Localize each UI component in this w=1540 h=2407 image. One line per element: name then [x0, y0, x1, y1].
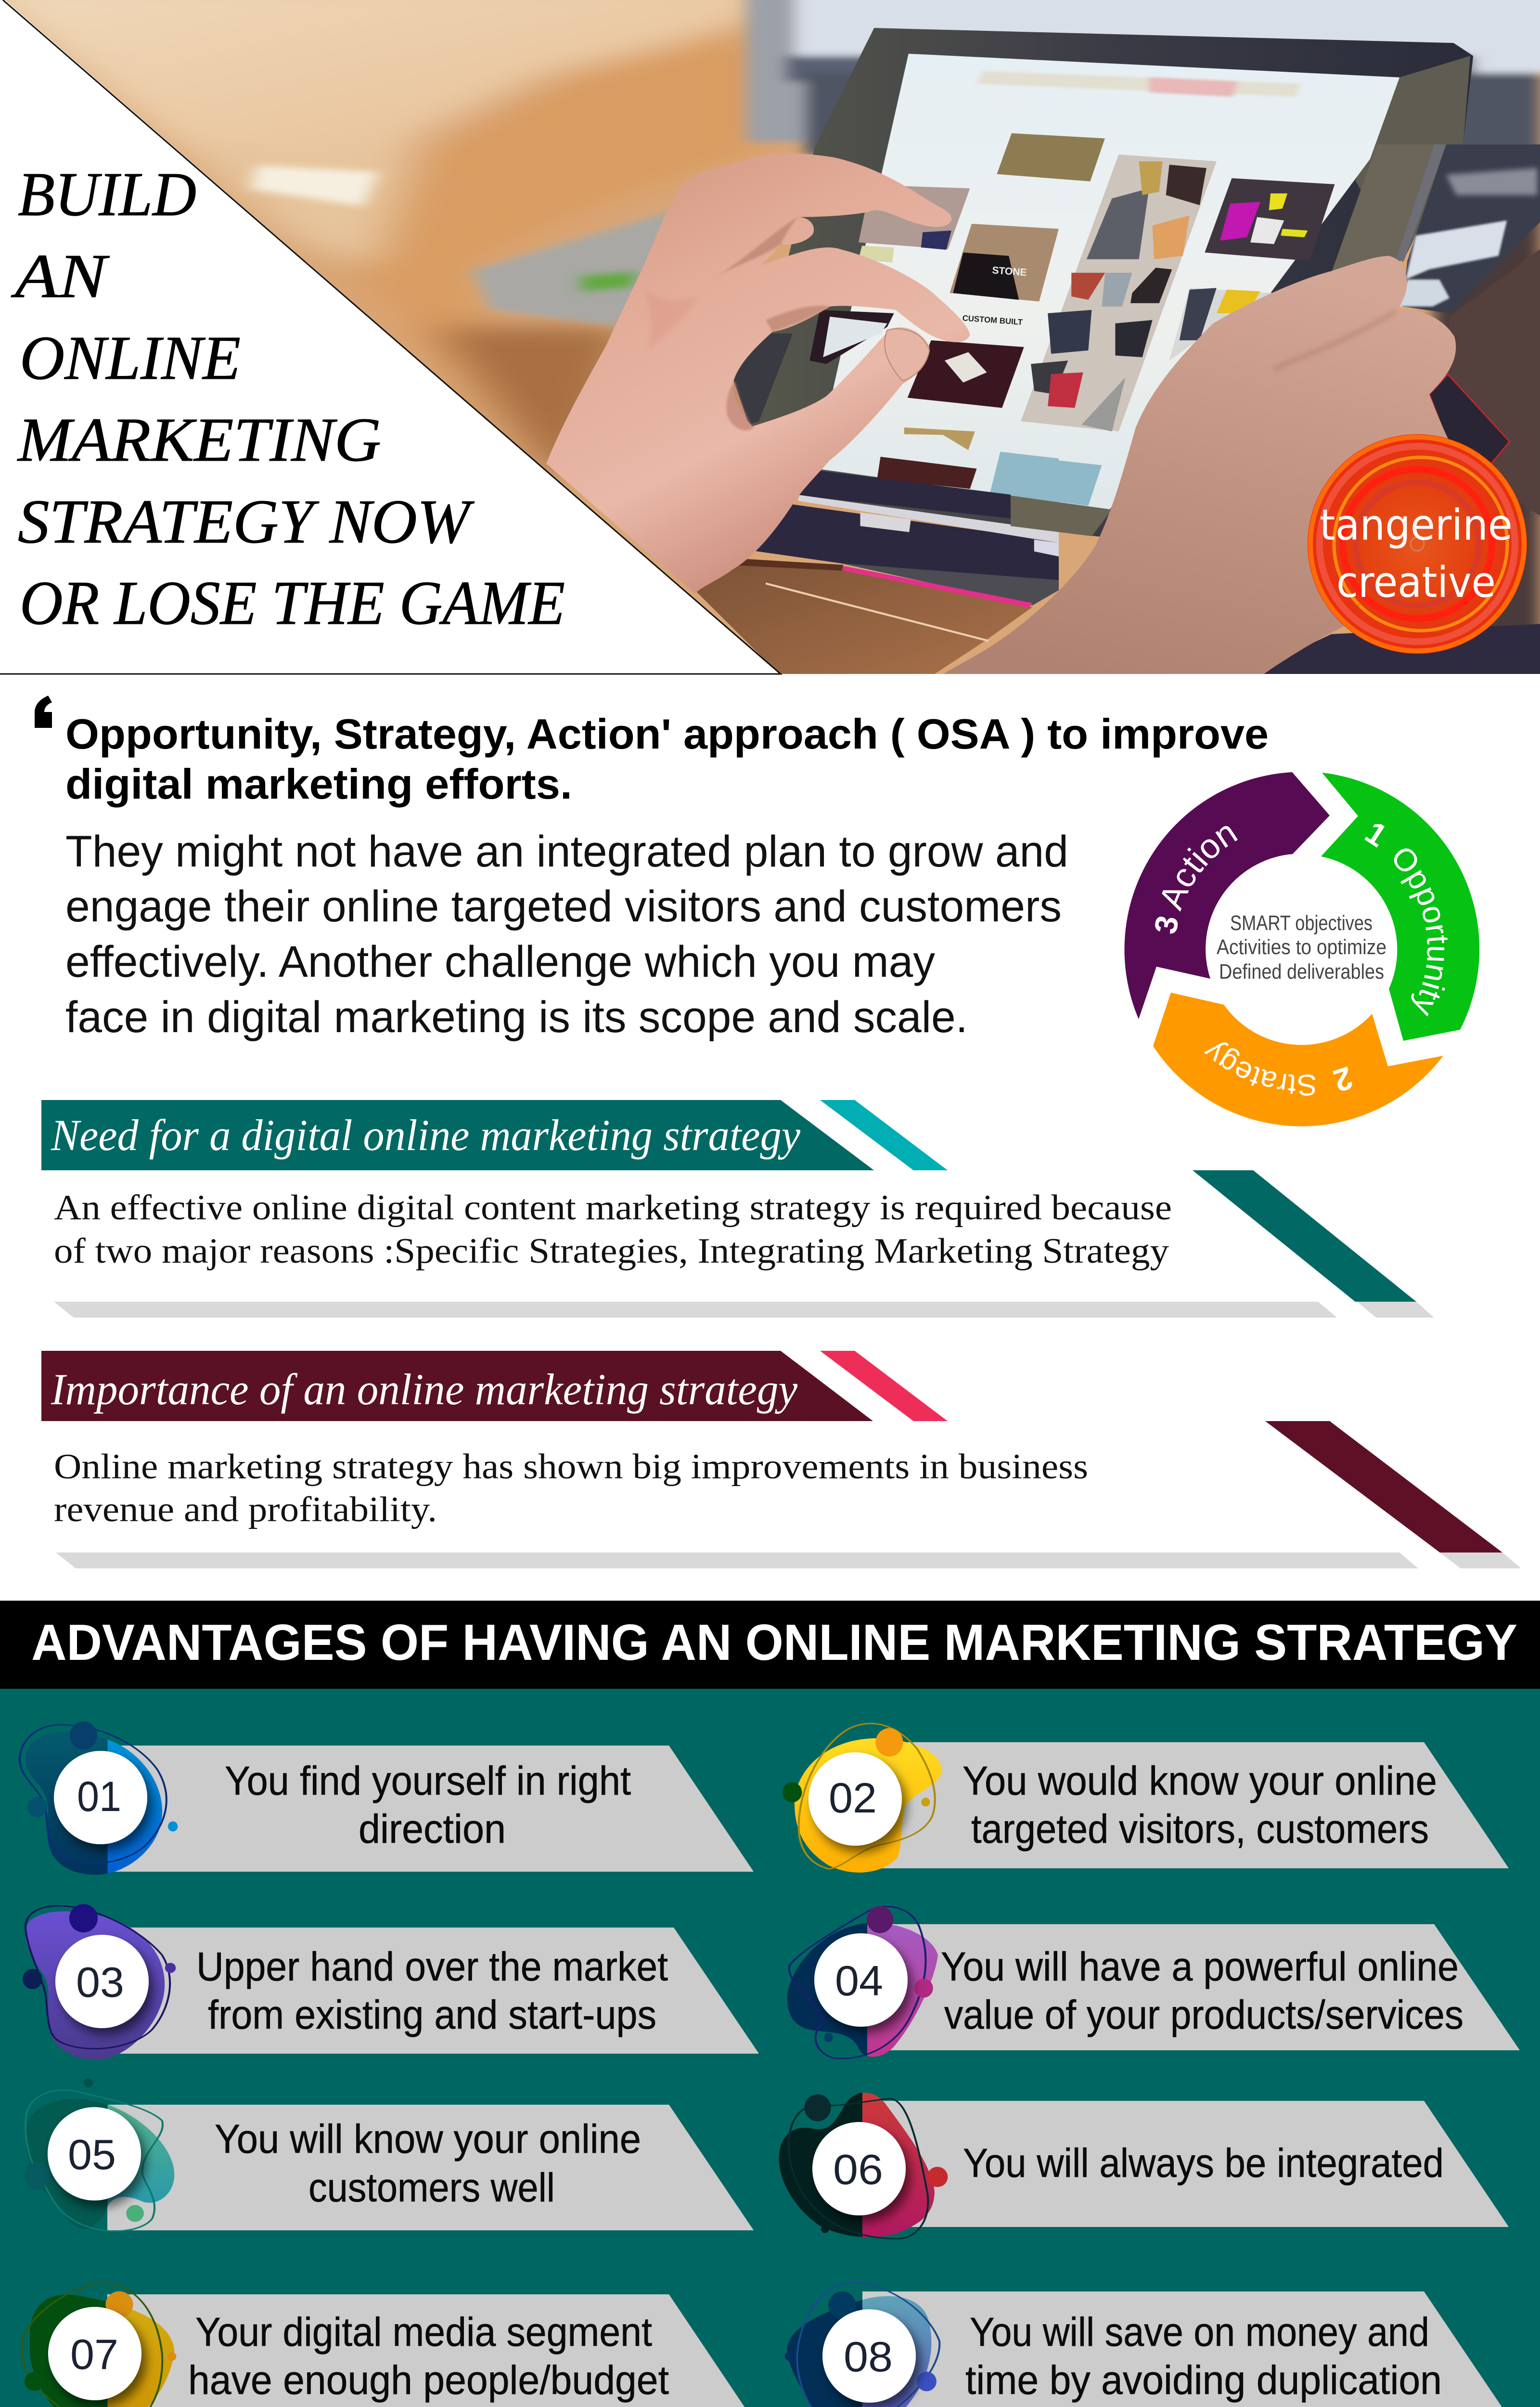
- item 05: 05: [68, 2131, 116, 2178]
- ring labels: 1: [1364, 824, 1385, 847]
- banner heading: Importance of an online marketing strategy: [51, 1365, 797, 1414]
- ring labels: Action: [1152, 813, 1244, 915]
- item 01: You find yourself in right: [225, 1758, 631, 1803]
- hero title: [11, 160, 565, 638]
- body text: Online marketing strategy has shown big improvements in business: [54, 1447, 1088, 1487]
- segment: action: [1125, 772, 1330, 1019]
- item 02: 02: [829, 1774, 877, 1822]
- logo: tangerine creative: tangerine: [1320, 500, 1513, 550]
- OSA body text: [65, 827, 1068, 1042]
- tablet stand and desk: [695, 468, 1059, 674]
- advantages heading band: [0, 1601, 1540, 1689]
- item 04: value of your products/services: [944, 1992, 1463, 2037]
- item 04: [787, 1906, 1520, 2058]
- hero title: ONLINE: [20, 324, 241, 393]
- body text: revenue and profitability.: [54, 1490, 437, 1529]
- cycle centre text: Defined deliverables: [1219, 960, 1384, 984]
- item 07: [22, 2283, 754, 2407]
- advantages panel background: [0, 1689, 1540, 2407]
- corner diagonal: [1265, 1421, 1502, 1553]
- item 02: [783, 1723, 1509, 1873]
- body text: [54, 1447, 1088, 1529]
- OSA body text: They might not have an integrated plan to grow and: [65, 827, 1068, 876]
- hero title: AN: [11, 242, 110, 311]
- item 08: time by avoiding duplication: [965, 2357, 1442, 2403]
- body text: of two major reasons :Specific Strategies, Integrating Marketing Strategy: [54, 1231, 1169, 1271]
- segment: opportunity: [1321, 773, 1479, 1041]
- cycle centre text: Activities to optimize: [1217, 935, 1386, 959]
- corner diagonal: [1193, 1170, 1416, 1302]
- body text: [54, 1188, 1172, 1271]
- right background and stickers: [1247, 144, 1540, 674]
- item 03: Upper hand over the market: [196, 1944, 668, 1989]
- blurred room background and tablet body: [0, 0, 1540, 674]
- item 01: direction: [359, 1806, 506, 1851]
- photo detail, left half: [546, 154, 1059, 674]
- hero diagonal rule: [0, 0, 781, 674]
- body text: An effective online digital content marketing strategy is required because: [54, 1188, 1172, 1228]
- item 04: You will have a powerful online: [941, 1944, 1459, 1989]
- banner heading: Need for a digital online marketing strategy: [51, 1111, 800, 1160]
- grey foot tab: [1357, 1302, 1434, 1318]
- grey foot tab: [1440, 1553, 1521, 1568]
- right hand: [943, 256, 1456, 674]
- ring labels: Strategy: [1204, 1042, 1316, 1096]
- OSA cycle diagram: [1125, 772, 1479, 1126]
- item 06: [779, 2093, 1509, 2239]
- item 08: [785, 2282, 1509, 2407]
- ring labels: 2: [1333, 1067, 1352, 1091]
- screen thumbnails: [1011, 155, 1335, 536]
- cycle centre text: SMART objectives: [1230, 911, 1373, 935]
- item 08: You will save on money and: [970, 2309, 1429, 2355]
- screen thumbnails: CUSTOM BUILT: [962, 313, 1023, 327]
- item 05: [25, 2078, 754, 2231]
- item 03: [23, 1904, 759, 2060]
- advantages heading band: ADVANTAGES OF HAVING AN ONLINE MARKETING STRATEGY: [31, 1614, 1517, 1671]
- item 07: 07: [70, 2330, 118, 2378]
- item 03: from existing and start-ups: [208, 1992, 656, 2037]
- hero white diagonal panel: [0, 0, 781, 674]
- photo detail, right half: [943, 144, 1540, 674]
- OSA body text: effectively. Another challenge which you may: [65, 937, 935, 986]
- logo: tangerine creative: creative: [1336, 557, 1496, 607]
- OSA heading: [65, 710, 1269, 808]
- grey foot bar: [54, 1302, 1337, 1318]
- grey foot bar: [56, 1553, 1418, 1568]
- banner: [41, 1351, 873, 1421]
- hero photo: hands on tablet: [0, 0, 1540, 674]
- cycle centre text: [1217, 911, 1386, 984]
- item 06: You will always be integrated: [963, 2140, 1444, 2186]
- OSA heading: digital marketing efforts.: [65, 760, 572, 808]
- banner: [41, 1100, 874, 1170]
- item 02: You would know your online: [962, 1758, 1437, 1803]
- OSA heading: Opportunity, Strategy, Action' approach ( OSA ) to improve: [65, 710, 1269, 758]
- item 05: customers well: [308, 2165, 555, 2210]
- ring labels: [1147, 813, 1456, 1102]
- item 07: Your digital media segment: [195, 2309, 652, 2355]
- item 01: [20, 1721, 754, 1875]
- ring labels: 3: [1147, 913, 1185, 937]
- banner stripe: [820, 1351, 948, 1421]
- screen thumbnails: [733, 185, 1059, 503]
- icon: quote mark: [35, 696, 52, 728]
- panel: importance of a strategy: [41, 1351, 1521, 1568]
- segment: strategy: [1153, 993, 1443, 1126]
- hero title: STRATEGY NOW: [18, 487, 475, 556]
- item 05: You will know your online: [215, 2116, 641, 2161]
- item 04: 04: [835, 1957, 883, 2005]
- logo: tangerine creative: [1308, 434, 1527, 654]
- item 08: 08: [844, 2333, 893, 2381]
- hero title: OR LOSE THE GAME: [20, 569, 565, 638]
- item 03: 03: [76, 1958, 124, 2006]
- ring labels: Opportunity: [1394, 848, 1448, 1017]
- item 06: 06: [833, 2146, 883, 2193]
- banner stripe: [820, 1100, 948, 1170]
- hero title: MARKETING: [17, 405, 381, 475]
- item 02: targeted visitors, customers: [971, 1806, 1429, 1851]
- OSA body text: engage their online targeted visitors and customers: [65, 882, 1062, 931]
- left hand: [546, 154, 970, 594]
- item 07: have enough people/budget: [188, 2357, 669, 2403]
- OSA body text: face in digital marketing is its scope and scale.: [65, 993, 968, 1042]
- hero title: BUILD: [18, 160, 196, 229]
- screen thumbnails: STONE: [992, 265, 1027, 278]
- item 01: 01: [77, 1773, 121, 1820]
- panel: need for a strategy: [41, 1100, 1434, 1318]
